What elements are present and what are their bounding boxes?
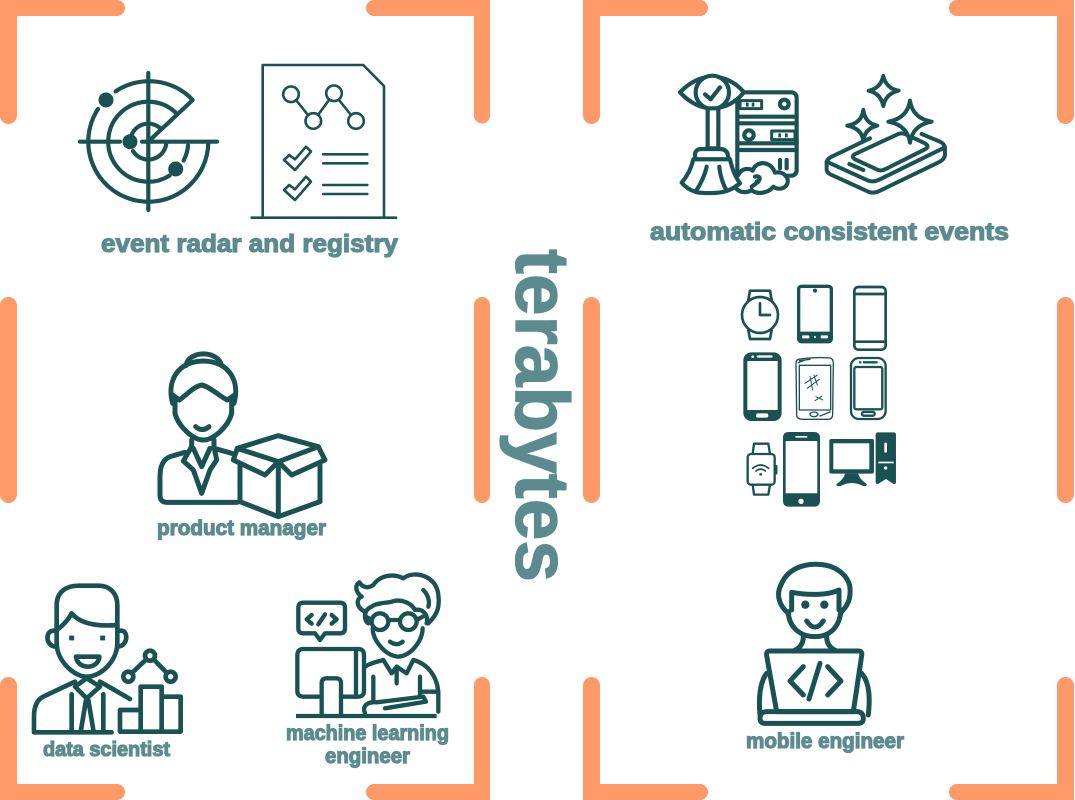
icon: server with broom and eye [680, 76, 797, 193]
frame: left orange brackets [0, 0, 490, 800]
icon: sparkling clean phone [827, 76, 945, 193]
label line: machine learning: machine learning [286, 722, 449, 745]
icon: desktop computer [829, 432, 896, 486]
icon: analog watch [742, 291, 778, 339]
icon: rounded phone [851, 358, 886, 419]
label: automatic consistent events: automatic consistent events [650, 218, 1009, 246]
icon: data scientist [34, 586, 181, 732]
icon: tall phone [783, 433, 819, 506]
label: data scientist: data scientist [43, 739, 170, 761]
icon: slim phone [854, 287, 886, 350]
icon: mobile engineer [759, 564, 869, 723]
frame: right orange brackets [583, 0, 1074, 800]
icon: smartwatch [748, 444, 776, 495]
icon: registry document [252, 65, 396, 218]
label: product manager: product manager [157, 517, 326, 540]
label line: engineer: engineer [325, 745, 410, 768]
icon: radar [80, 73, 217, 210]
icon: dark handset [743, 352, 782, 421]
icon: phone with dark base [799, 286, 831, 342]
icon: device collection [742, 286, 896, 506]
label: mobile engineer: mobile engineer [746, 730, 904, 753]
icon: product manager [160, 354, 325, 517]
title: terabytes: terabytes [499, 249, 584, 582]
label: event radar and registry: event radar and registry [101, 230, 398, 258]
label: machine learning engineer [286, 722, 449, 768]
icon: cracked phone [796, 358, 833, 419]
icon: machine learning engineer [296, 574, 439, 716]
